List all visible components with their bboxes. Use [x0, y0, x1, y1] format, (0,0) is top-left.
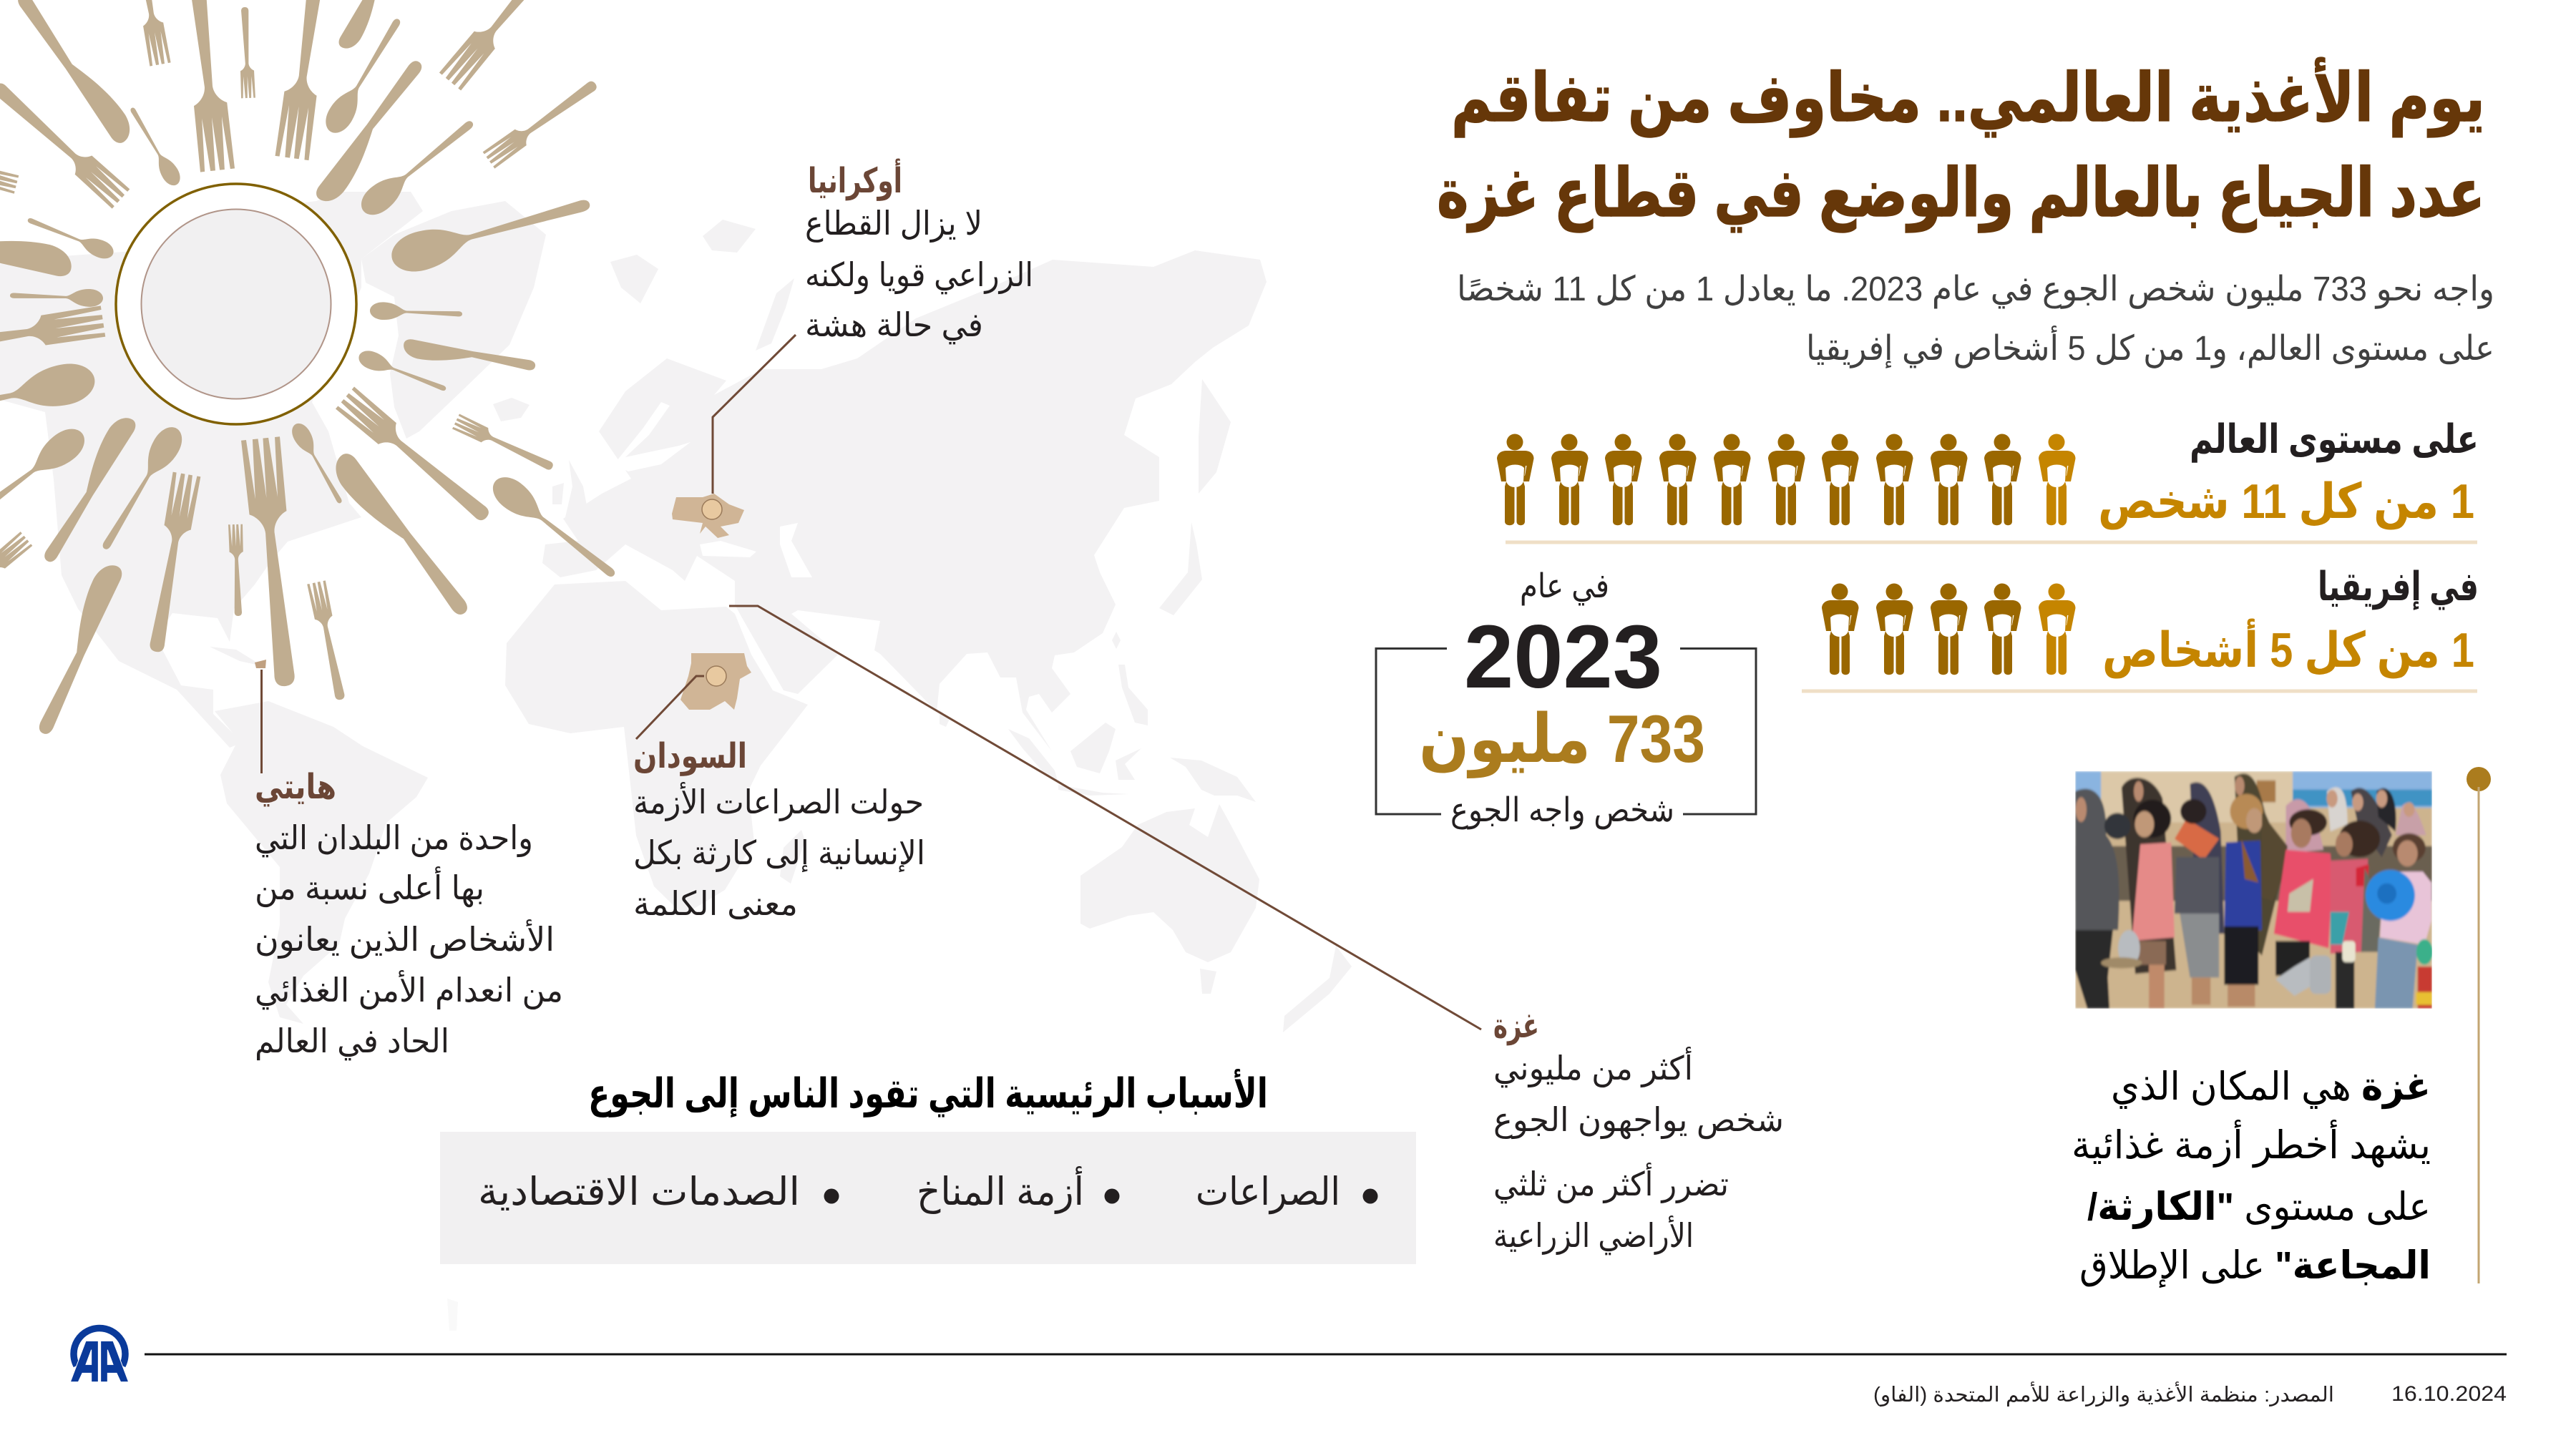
description: الأراضي الزراعية: [1493, 1215, 1694, 1256]
heading: worldwide: على مستوى العالم: [2190, 416, 2479, 463]
year number: 2023: [1464, 607, 1662, 707]
cutlery sunburst: [0, 0, 623, 736]
utensil: knife: [311, 58, 434, 208]
icon: empty plate: [116, 184, 356, 424]
utensil: knife: [32, 411, 140, 564]
cause: conflicts: الصراعات: [1196, 1170, 1340, 1214]
country name: السودان: [633, 738, 747, 776]
description: تضرر أكثر من ثلثي: [1493, 1163, 1729, 1204]
description: واحدة من البلدان التي: [255, 819, 533, 858]
utensil: fork: [0, 532, 32, 622]
icon: Anadolu Agency logo: [70, 1329, 129, 1382]
divider: [1506, 541, 2477, 544]
map: North America: [0, 192, 423, 748]
panel: main causes of hunger: [440, 1069, 1416, 1264]
description: الحاد في العالم: [255, 1022, 449, 1061]
description: في حالة هشة: [805, 306, 983, 345]
callout: Gaza famine statement: [2072, 1065, 2431, 1288]
label: in year: في عام: [1520, 567, 1609, 606]
callout: Gaza: [729, 606, 1784, 1256]
title: [1437, 58, 2485, 233]
stat: 733 million: 733 مليون: [1419, 701, 1705, 778]
subtitle: [1457, 270, 2494, 368]
utensil: spoon: [487, 470, 623, 587]
leader line: [729, 606, 1481, 1029]
cause: economic shocks: الصدمات الاقتصادية: [478, 1170, 800, 1213]
utensil: spoon: [288, 420, 348, 507]
description: [1493, 1047, 1784, 1256]
callout: Gaza famine statement: غزة هي المكان الذي: [2111, 1065, 2431, 1109]
utensil: fork: [0, 76, 130, 209]
photo: children queuing with pots: [2075, 771, 2433, 1009]
map: Australia: [1080, 804, 1259, 962]
map: seas: [614, 402, 812, 577]
description: الإنسانية إلى كارثة بكل: [633, 834, 925, 872]
callout: Ukraine: [702, 158, 1033, 519]
utensil: knife: [0, 205, 75, 281]
map: New Zealand: [1283, 946, 1352, 1032]
map highlight: Sudan: [680, 653, 751, 710]
timeline marker: dot and vertical line: [2467, 767, 2491, 1283]
country name: هايتي: [255, 768, 336, 807]
utensil: fork: [228, 524, 245, 616]
utensil: fork: [336, 387, 496, 528]
description: معنى الكلمة: [633, 885, 798, 922]
utensil: spoon: [0, 358, 99, 441]
utensil: knife: [15, 0, 137, 147]
panel: 2023 total: [1376, 567, 1756, 830]
stat: 1 in 5: 1 من كل 5 أشخاص: [2102, 618, 2474, 679]
utensil: spoon: [356, 347, 449, 398]
world map: [0, 192, 1352, 1331]
panel: Africa ratio: [1802, 564, 2479, 693]
utensil: spoon: [93, 421, 188, 556]
utensil: fork: [241, 436, 305, 688]
country name: أوكرانيا: [808, 158, 902, 201]
utensil: fork: [177, 0, 235, 172]
heading: الأسباب الرئيسية التي تقود الناس إلى الجوع: [588, 1069, 1268, 1118]
map: Antarctic island outline: [447, 1298, 458, 1331]
utensil: knife: [335, 0, 421, 54]
map: Svalbard and Arctic islands: [610, 220, 794, 351]
map: Tasmania: [1200, 969, 1216, 994]
box frame: [1376, 648, 1756, 814]
utensil: fork: [142, 472, 200, 654]
utensil: fork: [483, 75, 601, 169]
utensil: knife: [25, 559, 127, 736]
subtitle: على مستوى العالم، و1 من كل 5 أشخاص في إفريقيا: [1806, 326, 2494, 368]
leader line: [260, 670, 263, 773]
utensil: spoon: [0, 421, 92, 540]
map: Indonesia and Philippines: [1008, 665, 1148, 796]
description: شخص يواجهون الجوع: [1493, 1101, 1784, 1140]
footer rule: [145, 1354, 2507, 1355]
leader line: [713, 335, 796, 494]
description: حولت الصراعات الأزمة: [633, 781, 924, 822]
map: Eurasia: [542, 250, 1267, 751]
icon row: 5 people: [1822, 584, 2075, 675]
divider: [1802, 690, 2477, 693]
icon row: 11 people: [1497, 434, 2075, 525]
utensil: spoon: [125, 104, 184, 189]
callout: Gaza famine statement: يشهد أخطر أزمة غذائية: [2072, 1120, 2431, 1168]
description: [805, 205, 1033, 345]
map: United Kingdom and Ireland: [552, 460, 587, 517]
stat: 1 in 11: 1 من كل 11 شخص: [2098, 474, 2474, 530]
description: من انعدام الأمن الغذائي: [255, 969, 563, 1010]
subtitle: واجه نحو 733 مليون شخص الجوع في عام 2023. ما يعادل 1 من كل 11 شخصًا: [1457, 270, 2494, 309]
utensil: fork: [0, 145, 19, 194]
source credit: المصدر: منظمة الأغذية والزراعة للأمم المتحدة (الفاو): [1873, 1381, 2334, 1407]
utensil: fork: [238, 7, 255, 98]
description: لا يزال القطاع: [805, 205, 982, 243]
utensil: spoon: [10, 287, 103, 307]
map: Madagascar: [780, 830, 805, 884]
label: people faced hunger: شخص واجه الجوع: [1450, 791, 1674, 830]
leader line: [636, 676, 704, 739]
utensil: fork: [0, 305, 105, 367]
description: الأشخاص الذين يعانون: [255, 919, 555, 959]
map: Sri Lanka and Taiwan: [940, 632, 1121, 727]
utensil: fork: [126, 0, 171, 67]
map: South America: [215, 701, 428, 1024]
utensil: fork: [307, 580, 350, 702]
utensil: fork: [452, 414, 556, 475]
map: Africa: [505, 581, 808, 915]
callout: Gaza famine statement: المجاعة" على الإطلاق: [2079, 1244, 2431, 1288]
heading: Africa: في إفريقيا: [2318, 564, 2479, 610]
region name: غزة: [1493, 1007, 1539, 1046]
utensil: knife: [401, 336, 536, 381]
cause: climate crisis: أزمة المناخ: [917, 1166, 1084, 1214]
utensil: spoon: [370, 302, 462, 323]
map: Greenland: [361, 201, 546, 439]
utensil: fork: [439, 0, 576, 91]
map highlight: Haiti: [255, 660, 266, 668]
map: Cuba: [210, 647, 263, 666]
callout: Sudan: [633, 666, 925, 922]
map: New Guinea: [1170, 758, 1256, 802]
utensil: spoon: [355, 112, 481, 221]
utensil: spoon: [320, 13, 409, 138]
utensil: fork: [275, 0, 337, 160]
description: الزراعي قويا ولكنه: [805, 256, 1033, 295]
utensil: spoon: [24, 212, 117, 262]
background panel: [440, 1132, 1416, 1264]
date: 16.10.2024: [2391, 1382, 2507, 1406]
map: Kamchatka and Japan: [1159, 379, 1231, 615]
callout: Gaza famine statement: على مستوى "الكارثة/: [2087, 1185, 2431, 1229]
description: [633, 781, 925, 922]
utensil: spoon: [387, 185, 595, 278]
marker: [702, 499, 722, 519]
description: بها أعلى نسبة من: [255, 866, 484, 908]
map: Iceland: [493, 398, 530, 421]
utensil: knife: [327, 449, 471, 626]
marker: [706, 666, 726, 686]
panel: global ratio: [1497, 416, 2479, 544]
callout: Haiti: [255, 670, 563, 1061]
description: أكثر من مليوني: [1493, 1047, 1693, 1088]
map highlight: Ukraine: [672, 494, 744, 538]
description: [255, 819, 563, 1061]
